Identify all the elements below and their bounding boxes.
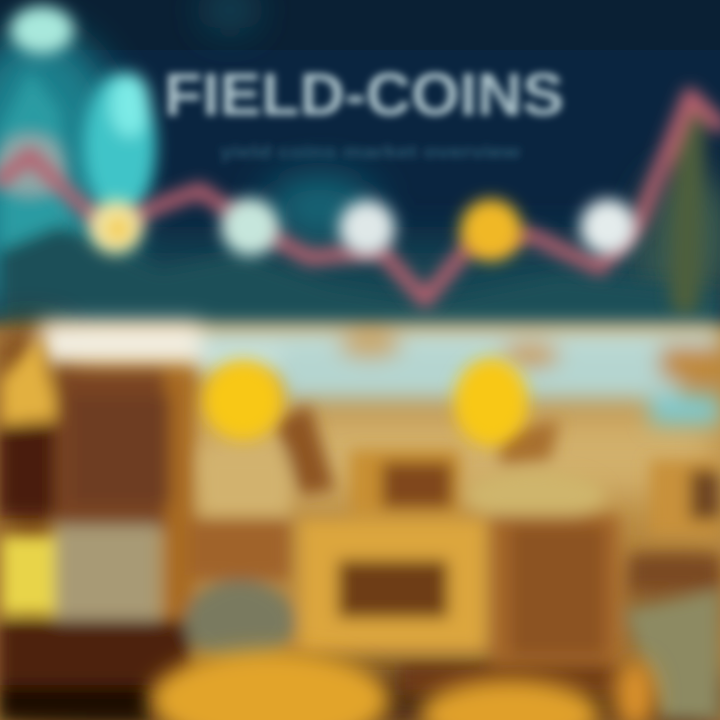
gold coins [203, 358, 528, 446]
subtitle: yield coins market overview [220, 142, 521, 162]
stacks of coins [0, 335, 720, 720]
chart markers [89, 198, 636, 261]
line chart [0, 95, 720, 300]
warm table tones [0, 330, 720, 720]
panel: teal peaks at left [0, 6, 720, 330]
panel: dark chart background [0, 0, 720, 340]
foreground coins [150, 650, 657, 720]
light band behind coins [40, 322, 720, 425]
panel: lower golden table [0, 325, 720, 720]
heading: FIELD-COINS [164, 61, 564, 128]
